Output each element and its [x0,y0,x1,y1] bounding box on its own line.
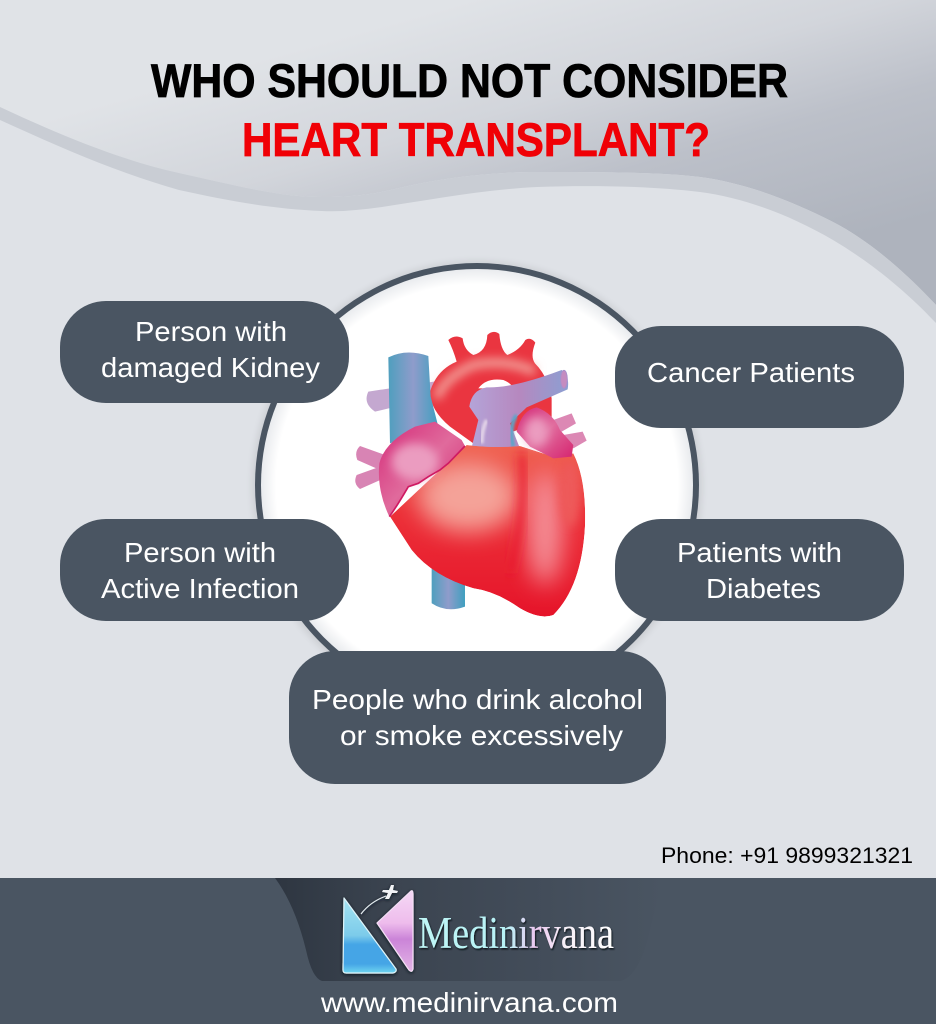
logo: Medinirvana [275,878,663,981]
pill: diabetes: Patients with [677,537,842,568]
website: www.medinirvana.com [320,987,618,1018]
pill: cancer patients [615,326,904,428]
aortic arch [430,332,552,443]
pill: alcohol or smoking: People who drink alcohol [312,684,643,715]
central circle [253,262,701,710]
pill: active infection: Active Infection [101,573,299,604]
pulmonary veins left [355,446,385,489]
ventricles [390,445,585,616]
left atrium [517,407,573,458]
pill: damaged kidney: damaged Kidney [101,352,320,383]
pulmonary artery [469,370,568,449]
pill: damaged kidney [60,301,349,403]
logo mark [343,885,413,973]
pill: cancer patients: Cancer Patients [647,357,855,388]
pill: active infection [60,519,349,621]
pill: damaged kidney: Person with [135,316,287,347]
superior vena cava [388,352,438,443]
phone number: Phone: +91 9899321321 [661,843,913,868]
pill: active infection: Person with [124,537,276,568]
title [151,54,788,166]
footer band [0,878,936,1024]
pulmonary veins right [553,413,587,448]
pill: diabetes: Diabetes [706,573,821,604]
pill: diabetes [615,519,904,621]
right atrium [379,422,465,517]
title: WHO SHOULD NOT CONSIDER [151,54,788,107]
back vessel [367,381,443,412]
title: HEART TRANSPLANT? [242,113,710,166]
pill: alcohol or smoking [289,651,666,784]
inferior vena cava [432,560,465,609]
icon: anatomical heart [355,332,587,616]
pill: alcohol or smoking: or smoke excessively [340,720,623,751]
wordmark: Medinirvana [418,908,614,958]
